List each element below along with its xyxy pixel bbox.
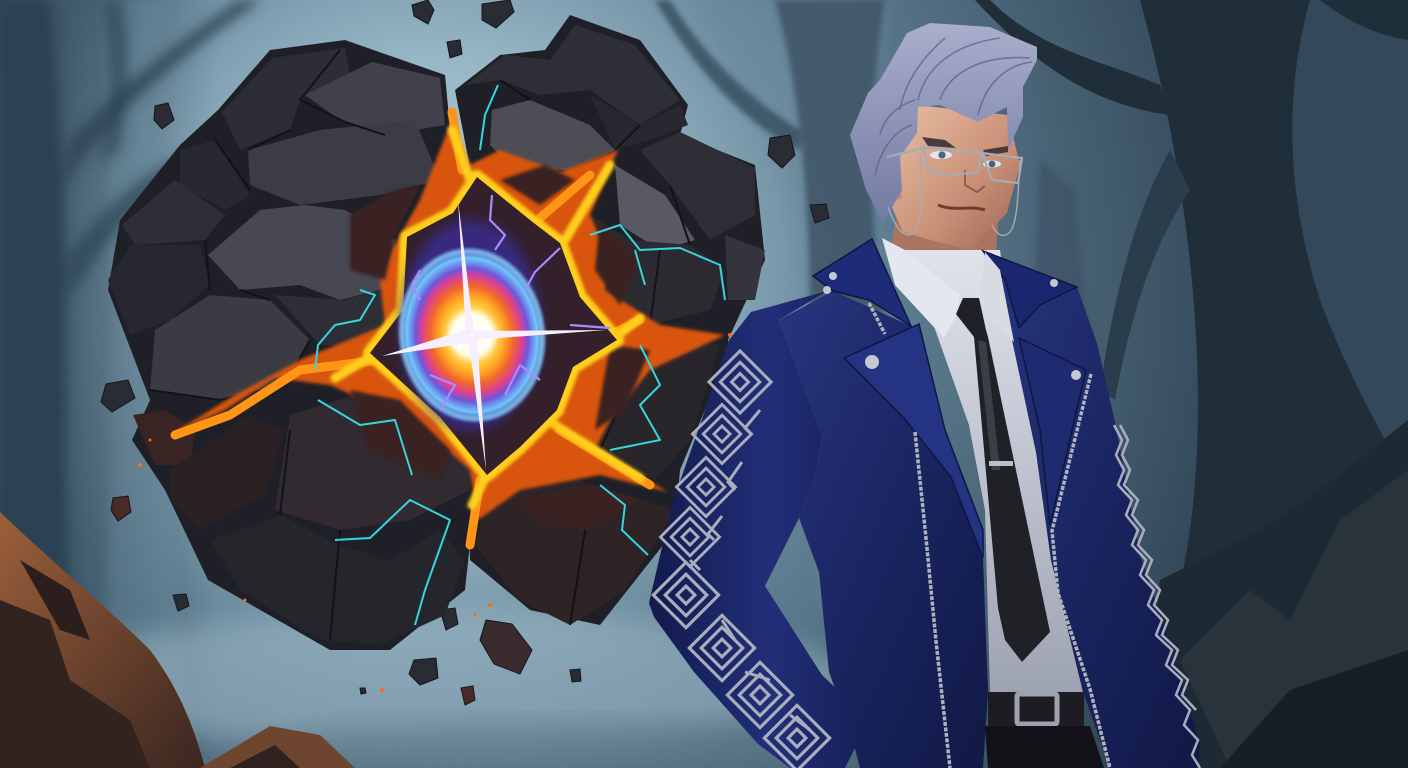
hair bbox=[850, 23, 1037, 223]
jacket left front bbox=[779, 291, 988, 768]
ground mist bbox=[50, 610, 850, 750]
collar left bbox=[813, 239, 911, 326]
flying rock debris bbox=[101, 0, 829, 705]
cyan halo bbox=[391, 242, 553, 428]
eyes bbox=[930, 151, 952, 159]
head bbox=[890, 105, 1020, 250]
left edge shade bbox=[0, 0, 220, 768]
cavity blue haze bbox=[400, 220, 540, 430]
core flare bbox=[448, 311, 496, 359]
collar right bbox=[983, 251, 1077, 328]
brown foreground rock bbox=[0, 512, 355, 768]
lapel left bbox=[844, 324, 983, 558]
jacket right front bbox=[983, 251, 1200, 768]
belt buckle bbox=[1017, 694, 1057, 724]
mouth bbox=[938, 205, 985, 210]
neck bbox=[890, 200, 1000, 320]
left tree silhouette bbox=[0, 0, 262, 768]
eyebrows bbox=[922, 137, 1008, 156]
rock dark cracks bbox=[150, 50, 690, 640]
belt bbox=[988, 692, 1084, 726]
nose bbox=[965, 170, 985, 192]
cyan energy cracks bbox=[315, 85, 725, 625]
core rings bbox=[386, 238, 558, 432]
trousers bbox=[985, 726, 1104, 768]
tie clip bbox=[989, 461, 1013, 466]
lightning arms bbox=[382, 200, 606, 470]
yellow lava rim bbox=[335, 130, 640, 505]
lava branches bbox=[175, 112, 650, 545]
shirt collar bbox=[882, 238, 960, 338]
right sleeve zigzag bbox=[1114, 425, 1200, 768]
ear bbox=[876, 157, 902, 203]
right big tree bbox=[975, 0, 1408, 768]
sleeve diamond pattern bbox=[653, 351, 830, 768]
lava field bbox=[170, 120, 725, 520]
mid right trees bbox=[655, 0, 1125, 620]
necktie bbox=[956, 298, 1050, 662]
left sleeve bbox=[649, 291, 869, 768]
glasses bbox=[887, 147, 1022, 235]
lapel right bbox=[1019, 338, 1086, 525]
dark patches in lava field bbox=[350, 165, 650, 530]
core cavity bbox=[370, 177, 617, 475]
hair strands bbox=[875, 38, 1032, 175]
man in blue jacket bbox=[649, 23, 1200, 768]
right rock mass bbox=[455, 15, 765, 625]
ember sparks bbox=[138, 333, 732, 692]
purple arcs bbox=[412, 195, 610, 410]
boulder bbox=[108, 15, 765, 692]
left rock mass bbox=[108, 40, 478, 650]
rock facets bbox=[108, 25, 765, 645]
zippers bbox=[869, 303, 1110, 768]
studs bbox=[823, 272, 1081, 380]
tie highlight bbox=[978, 340, 1000, 470]
right foreground rocks bbox=[1140, 420, 1408, 768]
shirt bbox=[905, 250, 1083, 692]
distant trees bbox=[100, 0, 890, 768]
